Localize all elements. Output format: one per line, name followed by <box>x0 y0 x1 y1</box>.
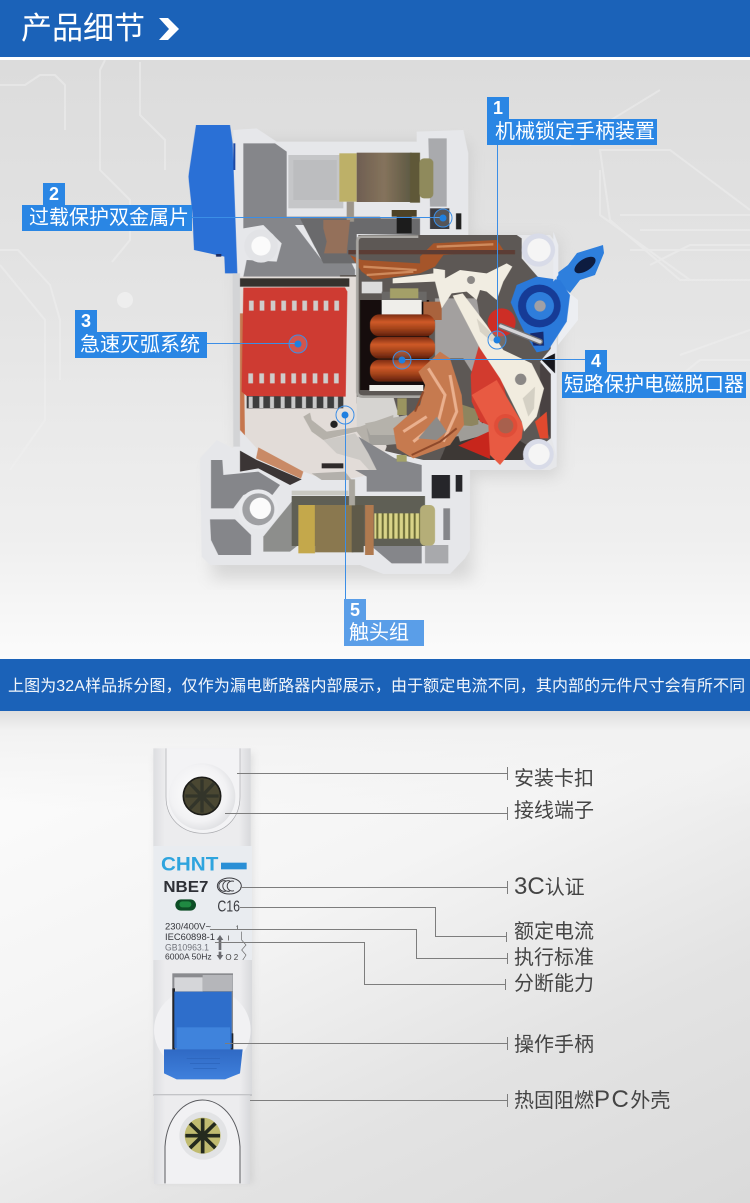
callout 5: 5 <box>350 600 360 620</box>
lower housing <box>210 430 462 563</box>
silver bar <box>365 415 420 435</box>
coil <box>370 314 435 336</box>
heading: product details: 产品细节 <box>21 11 145 46</box>
spec label: standard: 执行标准 <box>514 947 594 969</box>
spec text: IEC60898-1 <box>165 932 215 942</box>
bottom terminal module <box>154 1095 250 1184</box>
callout 1 <box>164 97 657 1144</box>
spec leader lines <box>210 767 508 1107</box>
on-off arrows <box>217 935 223 960</box>
rating: C16 <box>217 899 240 916</box>
header bar <box>0 0 750 60</box>
right chamber parts <box>348 232 570 470</box>
label panel: 1 <box>236 925 240 932</box>
label panel: O 2 <box>225 953 239 962</box>
right chamber backdrop <box>340 235 551 460</box>
spec text <box>165 921 215 962</box>
marker 3 <box>289 335 307 353</box>
indicator <box>175 899 196 911</box>
callout 2: 2 <box>49 184 59 204</box>
upper mounting hole <box>244 229 278 263</box>
exploded breaker photo illustration <box>188 125 604 584</box>
marker 4 <box>393 351 411 369</box>
callout 2 <box>22 183 192 231</box>
label panel <box>153 846 252 962</box>
spec label: rated current: 额定电流 <box>514 921 594 943</box>
spec label: mounting clip: 安装卡扣 <box>514 768 594 790</box>
callout 4 <box>562 350 746 398</box>
callout 4: 短路保护电磁脱口器 <box>564 374 744 396</box>
spec text: 6000A 50Hz <box>165 952 212 962</box>
notice bar: 上图为32A样品拆分图，仅作为漏电断路器内部展示，由于额定电流不同，其内部的元件尺寸会有所不同 <box>8 678 745 695</box>
lower section background <box>0 711 750 1203</box>
chamber floor <box>240 277 387 479</box>
housing right edge <box>540 232 558 458</box>
spec label: breaking capacity: 分断能力 <box>514 973 594 995</box>
marker 1 <box>488 331 506 349</box>
front-view breaker <box>153 748 254 1184</box>
callout 1: 1 <box>493 98 503 118</box>
arc chute <box>242 287 347 408</box>
spec label: 3C certification: 3C认证 <box>514 873 585 900</box>
shadow <box>212 143 559 579</box>
breaker housing <box>200 128 557 574</box>
top terminal module <box>153 748 251 847</box>
operating handle section <box>153 960 252 1096</box>
model: NBE7 <box>163 879 208 896</box>
notice bar <box>0 659 750 711</box>
red trip lever <box>488 308 516 336</box>
blue side tab <box>188 125 237 273</box>
cream latch <box>393 263 512 308</box>
spec text: GB10963.1 <box>165 942 209 952</box>
callout 3: 3 <box>81 311 91 331</box>
callout 5: 触头组 <box>349 622 409 644</box>
corner holes <box>522 233 555 267</box>
top section background with circuit pattern <box>0 60 750 659</box>
upper terminal window <box>288 155 343 208</box>
brand logo: CHNT <box>161 855 219 876</box>
upper terminal clamp <box>323 153 433 253</box>
handle tip in page coordinates <box>552 245 604 345</box>
top right ports <box>430 208 449 229</box>
leader lines and target markers <box>192 145 585 599</box>
upper housing interior <box>243 138 447 277</box>
callout 3 <box>75 310 207 358</box>
lower braid <box>393 352 464 458</box>
icon: chevron <box>159 18 179 40</box>
spec label: housing: 热固阻燃PC外壳 <box>514 1086 670 1113</box>
marker 5 <box>336 406 354 424</box>
callout 1: 机械锁定手柄装置 <box>495 121 655 143</box>
3C mark <box>217 878 241 894</box>
cream arm <box>453 293 544 432</box>
breaker shadow <box>155 753 254 1183</box>
callout 3: 急速灭弧系统 <box>80 334 200 356</box>
moving contact <box>303 413 487 477</box>
marker 2 <box>434 209 452 227</box>
wire link <box>501 326 540 342</box>
steel strip and braid <box>350 240 503 280</box>
label panel: I <box>227 934 229 943</box>
spec label: handle: 操作手柄 <box>514 1034 594 1056</box>
callout 2: 过载保护双金属片 <box>29 207 189 229</box>
spec text: 230/400V~ <box>165 921 211 931</box>
lower terminal clamp <box>298 479 435 555</box>
callout 4: 4 <box>591 351 601 371</box>
callout 5 <box>344 599 424 646</box>
spec label: terminal: 接线端子 <box>514 800 594 822</box>
blue handle knob <box>511 277 570 352</box>
